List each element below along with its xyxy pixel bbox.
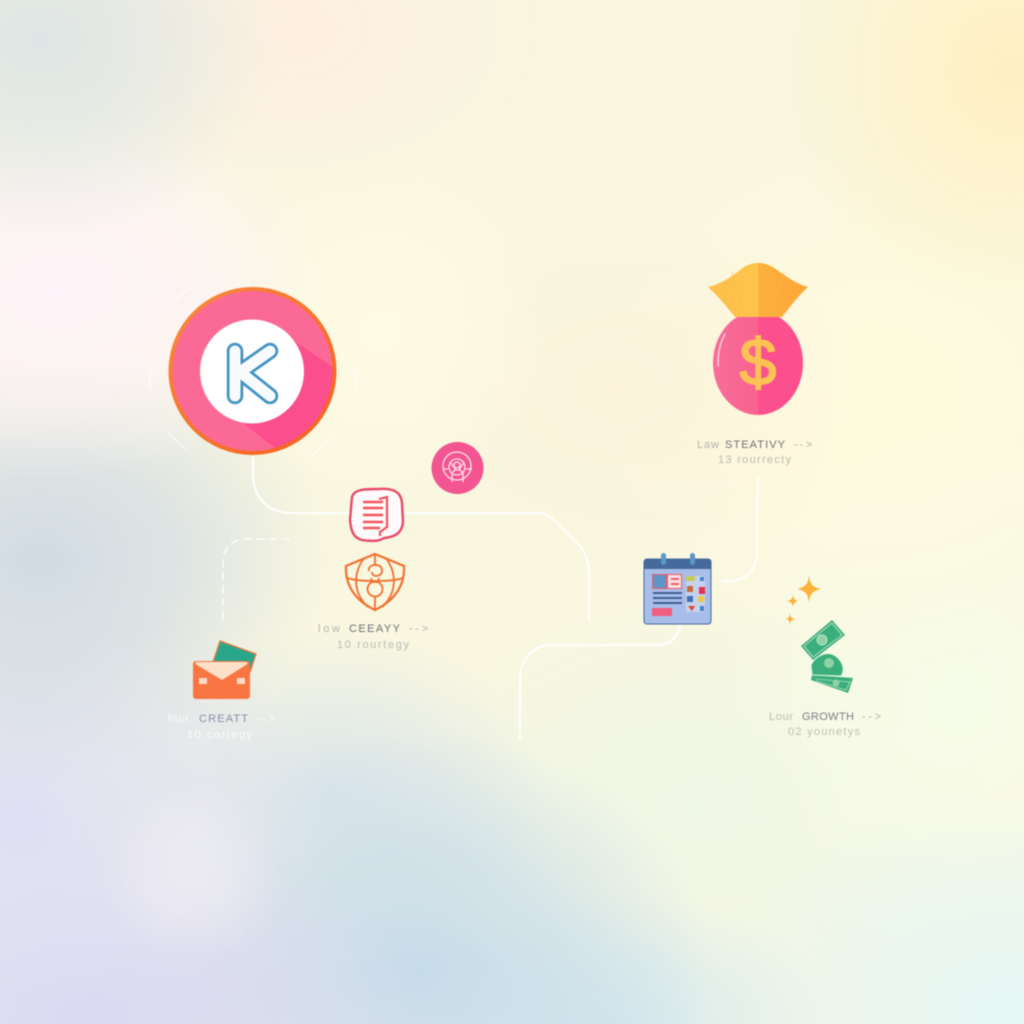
label: GROWTH: Lour: [769, 711, 793, 723]
label: STEATIVY: STEATIVY: [725, 439, 786, 451]
label: CREATT: CREATT: [199, 713, 248, 725]
icon: small pink target badge: [432, 442, 484, 494]
label: STEATIVY: 13 rourrecty: [718, 454, 792, 466]
label: CREATT: [168, 713, 275, 741]
connector: calendar to money bag: [723, 478, 758, 581]
label: CREATT: 10 cortegy: [187, 729, 252, 741]
icon: money bag with dollar sign: $: [740, 325, 776, 399]
connector: calendar to lower left: [520, 625, 680, 738]
label: STEATIVY: Law: [697, 439, 719, 451]
icon: calendar: [644, 553, 711, 624]
icon: money bag with dollar sign: [708, 263, 808, 415]
connector: dashed path to envelope: [223, 539, 290, 620]
label: CEEAYY: 10 rourtegy: [337, 639, 410, 651]
icon: green banknotes: [801, 620, 853, 693]
label: GROWTH: [769, 711, 881, 738]
label: CEEAYY: -->: [409, 623, 428, 635]
label: STEATIVY: [697, 439, 812, 466]
label: STEATIVY: -->: [794, 439, 812, 451]
connector: logo to document and branch: [253, 458, 589, 619]
label: GROWTH: GROWTH: [802, 711, 854, 723]
icon: sparkles: [786, 575, 821, 625]
label: CEEAYY: [318, 623, 428, 651]
label: GROWTH: -->: [862, 711, 881, 723]
label: CEEAYY: CEEAYY: [349, 623, 401, 635]
label: GROWTH: 02 younetys: [788, 726, 860, 738]
icon: orange globe shield: [346, 554, 404, 610]
label: CREATT: -->: [256, 713, 275, 725]
label: CREATT: lnur: [168, 713, 189, 725]
label: CEEAYY: low: [318, 623, 340, 635]
icon: orange envelope with green card: [193, 641, 256, 699]
icon: document speech card: [350, 489, 403, 541]
icon: K logo badge: [150, 284, 355, 460]
